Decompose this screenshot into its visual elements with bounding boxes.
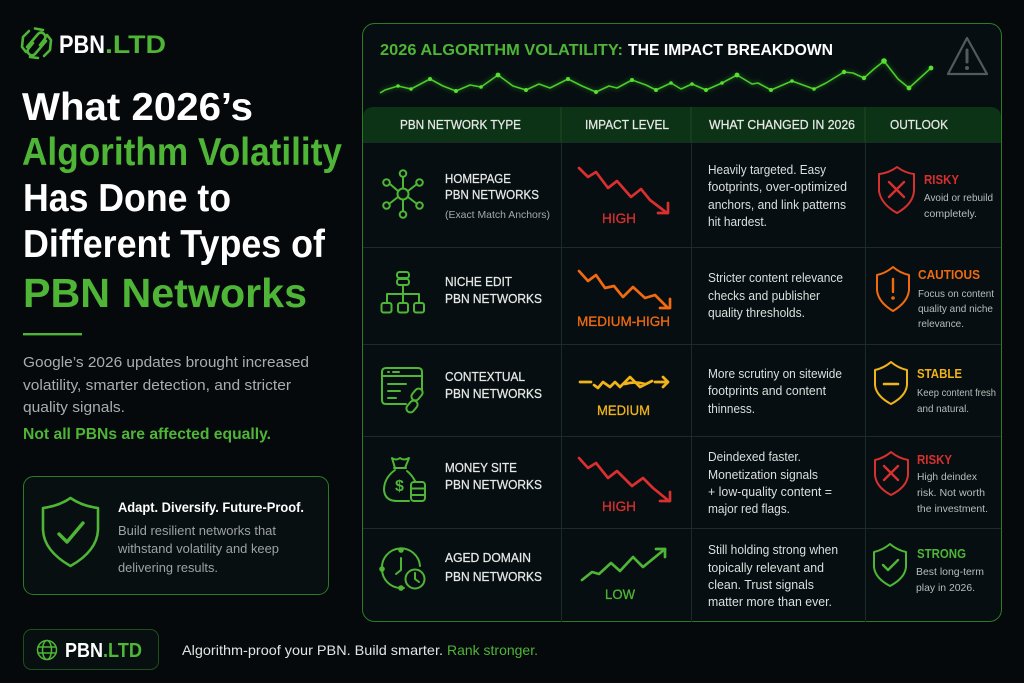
row: aged domain PBN networks: PBN NETWORKS [445, 570, 542, 584]
row: contextual PBN networks: thinness. [708, 402, 755, 416]
row: aged domain PBN networks: topically relevant and [708, 561, 824, 575]
panel: adapt callout: withstand volatility and keep [117, 542, 279, 556]
row: niche edit PBN networks [382, 267, 994, 330]
title [22, 86, 343, 316]
title: Algorithm Volatility [22, 131, 343, 174]
row: homepage PBN networks: (Exact Match Anchors) [445, 209, 550, 221]
logo [22, 28, 166, 59]
icon: risky shield [879, 167, 914, 213]
row: niche edit PBN networks: relevance. [918, 318, 964, 330]
row: aged domain PBN networks: LOW [605, 586, 636, 602]
panel: impact breakdown table [362, 24, 1002, 622]
heading: THE IMPACT BREAKDOWN [628, 42, 833, 59]
row: contextual PBN networks: MEDIUM [597, 402, 650, 418]
row: homepage PBN networks: RISKY [924, 173, 960, 187]
row: niche edit PBN networks: checks and publisher [708, 289, 820, 303]
row: homepage PBN networks: Avoid or rebuild [924, 192, 993, 204]
row: contextual PBN networks: More scrutiny on sitewide [708, 367, 842, 381]
row: contextual PBN networks: and natural. [917, 403, 969, 415]
row: money site PBN networks: + low-quality content = [708, 485, 832, 499]
row: aged domain PBN networks [380, 543, 984, 609]
icon: strong shield [874, 544, 906, 586]
intro text: Google’s 2026 updates brought increased [23, 354, 309, 371]
logo: PBN [59, 31, 105, 59]
row: money site PBN networks: Deindexed faster. [708, 450, 801, 464]
title: Different Types of [23, 223, 325, 266]
icon: browser with link [382, 368, 424, 414]
row: money site PBN networks: RISKY [917, 453, 953, 467]
title: Has Done to [23, 177, 231, 220]
row: contextual PBN networks [382, 362, 996, 418]
row: aged domain PBN networks: Still holding strong when [708, 543, 838, 557]
intro text: volatility, smarter detection, and stricter [23, 377, 291, 394]
row: contextual PBN networks: CONTEXTUAL [445, 370, 525, 384]
row: money site PBN networks: major red flags. [708, 502, 790, 516]
table header row: PBN NETWORK TYPE [400, 118, 521, 132]
footer logo badge: PBN [65, 640, 103, 662]
row: money site PBN networks: the investment. [917, 503, 988, 515]
row: contextual PBN networks: footprints and content [708, 384, 827, 398]
callout line: Not all PBNs are affected equally. [23, 426, 271, 443]
icon: clock cycle [380, 548, 424, 590]
panel: adapt callout: Build resilient networks that [118, 524, 277, 538]
title: What 2026’s [22, 86, 253, 129]
row: homepage PBN networks [383, 163, 993, 229]
chart: high impact trend [579, 168, 668, 213]
row: niche edit PBN networks: NICHE EDIT [445, 275, 512, 289]
row: money site PBN networks: HIGH [602, 498, 636, 514]
row: niche edit PBN networks: MEDIUM-HIGH [577, 313, 670, 329]
row: niche edit PBN networks: Stricter content relevance [708, 271, 843, 285]
row: homepage PBN networks: Heavily targeted. Easy [708, 163, 827, 177]
row: aged domain PBN networks: matter more than ever. [708, 595, 832, 609]
panel: adapt callout [24, 476, 328, 594]
chart: high impact trend [579, 458, 670, 501]
row: homepage PBN networks: completely. [924, 208, 977, 220]
row: contextual PBN networks: STABLE [917, 367, 962, 381]
row: homepage PBN networks: footprints, over-optimized [708, 180, 847, 194]
row: money site PBN networks: Monetization signals [708, 468, 818, 482]
row: money site PBN networks: High deindex [917, 471, 978, 483]
row: niche edit PBN networks: Focus on content [918, 288, 994, 300]
row: contextual PBN networks: Keep content fresh [917, 387, 996, 399]
icon: hub network [383, 170, 423, 218]
title: PBN Networks [23, 270, 307, 316]
footer tagline: Algorithm-proof your PBN. Build smarter. [182, 642, 443, 658]
chart: medium impact wave [580, 377, 668, 388]
icon: money bag with coins: $ [395, 478, 404, 495]
footer logo badge: .LTD [103, 640, 142, 662]
icon: cautious shield [877, 267, 909, 311]
chart: low impact trend [582, 549, 665, 580]
row: niche edit PBN networks: CAUTIOUS [918, 268, 980, 282]
icon: money bag with coins [384, 458, 425, 501]
logo: .LTD [105, 31, 166, 59]
intro text: quality signals. [23, 399, 125, 416]
table header row: WHAT CHANGED IN 2026 [709, 118, 855, 132]
icon: shield check [43, 498, 98, 566]
panel: adapt callout: delivering results. [118, 561, 218, 575]
panel: adapt callout: Adapt. Diversify. Future-Proof. [118, 500, 304, 515]
footer tagline: Rank stronger. [447, 642, 538, 658]
table header row: OUTLOOK [890, 118, 949, 132]
row: homepage PBN networks: hit hardest. [708, 215, 767, 229]
icon: risky shield [875, 452, 908, 495]
table header row [363, 107, 1001, 142]
row: money site PBN networks: PBN NETWORKS [445, 478, 542, 492]
row: money site PBN networks: MONEY SITE [445, 461, 517, 475]
chart: volatility sparkline [380, 58, 933, 94]
icon: globe [38, 640, 56, 660]
heading [380, 42, 833, 59]
icon: warning triangle [948, 38, 987, 74]
row: aged domain PBN networks: clean. Trust signals [708, 578, 814, 592]
row: niche edit PBN networks: quality thresholds. [708, 306, 805, 320]
heading: 2026 ALGORITHM VOLATILITY: [380, 42, 623, 59]
icon: hierarchy [382, 272, 424, 312]
row: aged domain PBN networks: play in 2026. [916, 582, 975, 594]
row: contextual PBN networks: PBN NETWORKS [445, 387, 542, 401]
row: money site PBN networks: risk. Not worth [917, 487, 985, 499]
row: homepage PBN networks: PBN NETWORKS [445, 188, 539, 202]
footer logo badge [24, 630, 158, 670]
row: aged domain PBN networks: AGED DOMAIN [445, 551, 531, 565]
row: homepage PBN networks: HOMEPAGE [445, 172, 511, 186]
row: niche edit PBN networks: PBN NETWORKS [445, 292, 542, 306]
row: money site PBN networks [384, 450, 988, 516]
row: niche edit PBN networks: quality and niche [918, 303, 993, 315]
row: homepage PBN networks: HIGH [602, 210, 636, 226]
intro text [23, 354, 309, 416]
row: aged domain PBN networks: Best long-term [916, 566, 984, 578]
row: homepage PBN networks: anchors, and link patterns [708, 198, 846, 212]
table header row: IMPACT LEVEL [585, 118, 669, 132]
chart: medium-high impact trend [579, 271, 670, 308]
icon: chain link hexagon [22, 28, 51, 58]
icon: stable shield [875, 362, 907, 404]
row: aged domain PBN networks: STRONG [917, 547, 966, 561]
